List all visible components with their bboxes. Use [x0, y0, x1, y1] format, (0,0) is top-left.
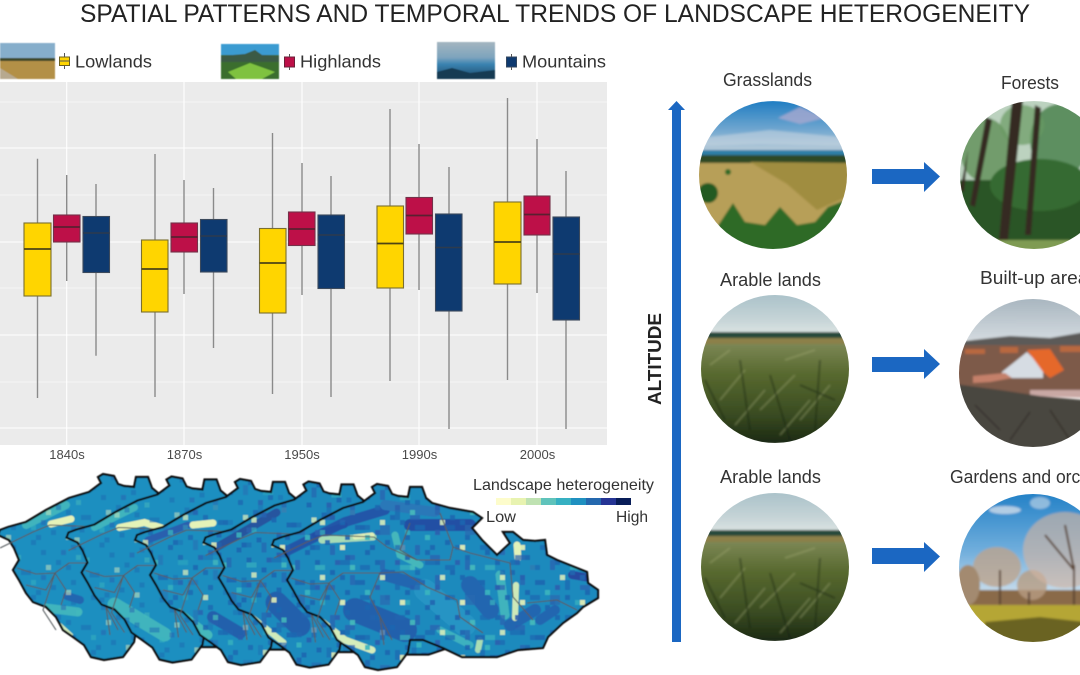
panel: arable lands to built-up areas	[697, 267, 1080, 450]
box group: 2000s	[494, 98, 580, 429]
title: SPATIAL PATTERNS AND TEMPORAL TRENDS OF LANDSCAPE HETEROGENEITY	[80, 0, 1030, 28]
photo: grasslands	[695, 100, 851, 253]
map legend: heterogeneity colour scale: High	[616, 509, 648, 526]
legend item: mountains: Mountains	[522, 52, 606, 72]
photo: arable lands	[697, 293, 853, 444]
x axis labels: 1840s	[49, 447, 85, 462]
legend item: lowlands: Lowlands	[75, 52, 152, 72]
label: grasslands: Grasslands	[723, 69, 812, 90]
legend item: highlands	[221, 44, 381, 79]
x axis labels	[49, 447, 556, 462]
photo: built-up areas	[955, 295, 1080, 450]
photo: gardens and orchards	[955, 490, 1080, 645]
legend item: lowlands	[0, 43, 152, 79]
chart background	[0, 82, 607, 445]
box group: 1870s	[142, 154, 227, 397]
legend item: highlands: Highlands	[300, 52, 381, 72]
box group: 1990s	[377, 109, 462, 429]
photo: arable lands	[697, 491, 853, 642]
x axis labels: 1950s	[284, 447, 320, 462]
legend: landscape types	[0, 42, 606, 79]
map: 1840s	[0, 472, 217, 662]
box group: 1840s	[24, 159, 110, 398]
box group: 1950s	[260, 133, 344, 397]
label: arable lands: Arable lands	[720, 466, 821, 487]
arrow: altitude axis	[668, 101, 685, 642]
map legend: heterogeneity colour scale: Landscape heterogeneity	[473, 477, 654, 494]
legend item: mountains	[437, 42, 606, 79]
map series: landscape heterogeneity	[0, 460, 610, 675]
photo: forests	[955, 100, 1080, 252]
panel: grasslands to forests	[695, 69, 1080, 253]
map: 1990s	[202, 480, 446, 670]
label: arable lands: Arable lands	[720, 269, 821, 290]
label: forests: Forests	[1001, 72, 1059, 93]
map: 1870s	[64, 474, 286, 664]
arrow: grasslands to forests	[872, 162, 940, 192]
map legend: heterogeneity colour scale	[473, 477, 654, 526]
map: 1950s	[133, 477, 354, 667]
x axis labels: 2000s	[520, 447, 556, 462]
x axis labels: 1870s	[167, 447, 203, 462]
panel: arable lands to gardens and orchards	[697, 466, 1080, 645]
panel: box plot chart	[0, 82, 607, 462]
arrow: arable lands to gardens and orchards	[872, 542, 940, 572]
map: 2000s	[270, 482, 600, 672]
label: altitude: ALTITUDE	[645, 313, 665, 405]
arrow: arable lands to built-up areas	[872, 349, 940, 379]
x axis labels: 1990s	[402, 447, 438, 462]
map legend: heterogeneity colour scale: Low	[486, 509, 516, 526]
